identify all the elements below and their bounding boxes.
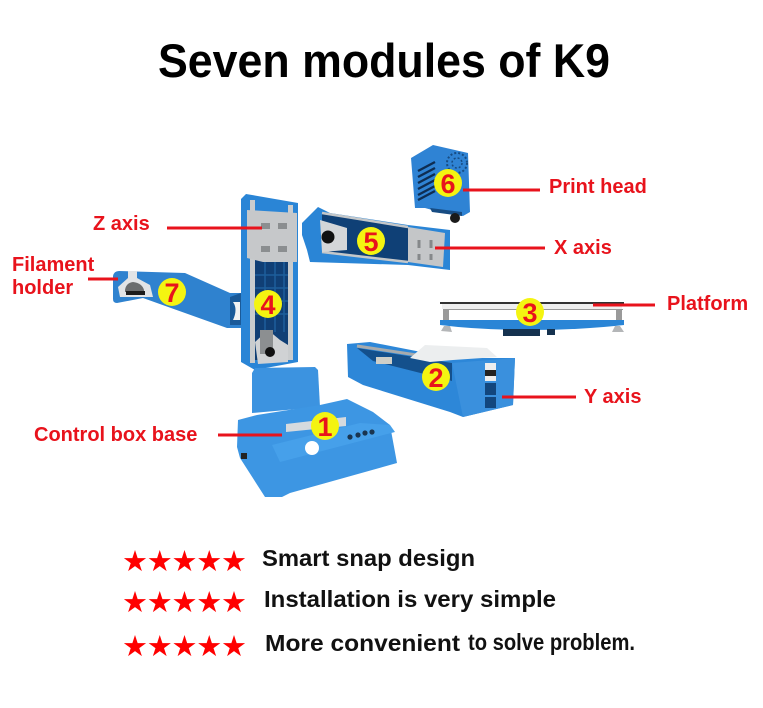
number badges bbox=[158, 169, 544, 442]
module 1: control box base bbox=[237, 367, 397, 497]
feature list: ★★★★★ bbox=[122, 585, 247, 619]
labels: Y axis bbox=[584, 386, 641, 408]
number badges: 4 bbox=[260, 290, 276, 320]
labels: Print head bbox=[549, 176, 647, 198]
feature list: Installation is very simple bbox=[264, 586, 556, 612]
title: Seven modules of K9 bbox=[158, 34, 610, 87]
labels: X axis bbox=[554, 237, 612, 259]
labels: holder bbox=[12, 277, 73, 299]
module 5: X axis bbox=[302, 207, 450, 270]
number badges: 5 bbox=[363, 227, 379, 257]
number badges: 1 bbox=[317, 412, 333, 442]
number badges: 6 bbox=[440, 169, 456, 199]
feature list: More convenient bbox=[265, 630, 460, 656]
feature list: ★★★★★ bbox=[122, 544, 247, 578]
number badges: 2 bbox=[428, 363, 444, 393]
leader lines bbox=[88, 190, 655, 435]
module 7: filament holder bbox=[113, 271, 241, 328]
module 3: platform bbox=[440, 302, 624, 336]
labels bbox=[12, 176, 748, 446]
labels: Control box base bbox=[34, 424, 197, 446]
feature list bbox=[122, 544, 635, 663]
labels: Platform bbox=[667, 293, 748, 315]
module 6: print head bbox=[411, 145, 470, 223]
number badges: 3 bbox=[522, 298, 538, 328]
feature list: to solve problem. bbox=[468, 629, 635, 655]
feature list: ★★★★★ bbox=[122, 629, 247, 663]
module 4: Z axis bbox=[241, 194, 298, 370]
feature list: Smart snap design bbox=[262, 545, 475, 571]
labels: Filament bbox=[12, 254, 95, 276]
number badges: 7 bbox=[164, 278, 180, 308]
module 2: Y axis bbox=[347, 342, 515, 417]
labels: Z axis bbox=[93, 213, 150, 235]
